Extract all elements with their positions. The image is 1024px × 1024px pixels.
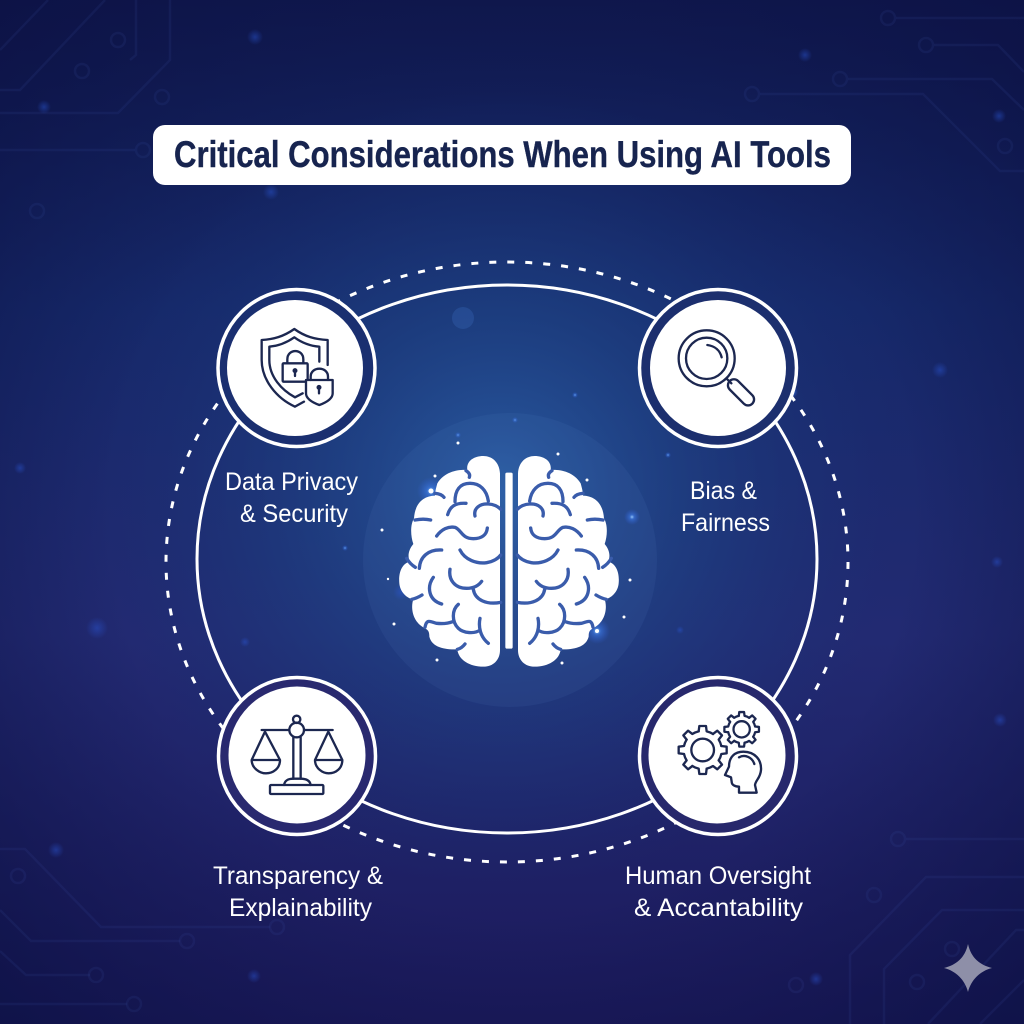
brain left hemisphere [399,456,501,667]
node ring [640,678,796,834]
label: transparency and explainability [213,862,383,922]
label: data privacy and security [225,468,358,528]
brain sparkles [380,442,640,664]
label: transparency and explainability: Transparency & [213,862,383,890]
node: data privacy [218,290,375,446]
node disc [228,686,366,824]
label: human oversight and accountability [625,862,811,922]
node: human oversight [640,678,796,834]
node: transparency [218,678,376,834]
icon: magnifying glass [679,330,757,408]
inner solid orbit [197,285,817,833]
icon: brain [399,456,619,667]
label: bias and fairness: Fairness [681,509,770,537]
node disc [227,300,363,436]
icon: shield with padlocks [262,329,333,407]
brain centre bar [505,473,513,649]
brain right hemisphere [517,456,619,667]
label: human oversight and accountability: Human Oversight [625,862,811,890]
node ring [640,290,796,446]
central glow disc [363,413,657,707]
icon: sparkle watermark [944,944,992,992]
node disc [650,300,786,436]
label: bias and fairness: Bias & [690,477,757,505]
label: data privacy and security: Data Privacy [225,468,358,496]
node ring [218,290,375,446]
label: human oversight and accountability: & Accantability [634,894,804,922]
node disc [648,686,786,824]
icon: gears and head [678,712,761,793]
label: bias and fairness [681,477,770,537]
label: data privacy and security: & Security [240,500,348,528]
outer dashed orbit [166,262,848,862]
node ring [218,678,376,834]
icon: balance scales [252,716,342,794]
title banner [153,125,851,185]
title text: Critical Considerations When Using AI Tools [174,134,831,175]
label: transparency and explainability: Explainability [229,894,372,922]
node: bias and fairness [640,290,796,446]
